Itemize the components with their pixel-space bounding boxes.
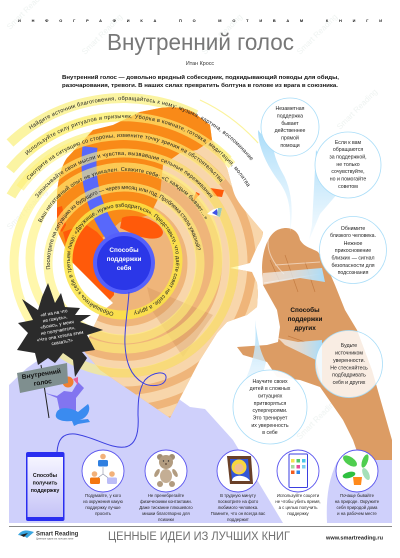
caption 4: а с целью получить <box>279 505 318 510</box>
callout 3: Нежное <box>344 241 362 247</box>
callout 5: притворяться <box>254 401 287 407</box>
caption 3: поддержит <box>227 517 249 522</box>
dark speech star: сказать?» <box>51 338 74 346</box>
caption 3: Помните, что он всегда вас <box>211 511 266 516</box>
phone: поддержку <box>31 488 59 494</box>
caption 2 <box>139 493 193 522</box>
caption 2: мишки благотворно для <box>142 511 190 516</box>
inner yellow rings <box>14 117 234 373</box>
callout 2: не только <box>336 162 360 168</box>
dark speech star: «Боюсь, у меня <box>40 319 75 330</box>
text: Smart Reading <box>295 12 339 56</box>
caption 1: из окружения какую <box>83 499 124 504</box>
caption 3: В трудную минуту <box>220 493 257 498</box>
callout 3: Обнимите <box>341 226 365 232</box>
footer logo: Ценные идеи из лучших книг <box>36 536 74 540</box>
ring text 1: Найдите источник благоговения, обращайтесь к нему: музыка, картина, воспоминание <box>28 96 253 160</box>
hand label: других <box>294 325 316 332</box>
dark speech star <box>17 283 103 377</box>
ring text 3: Смотрите на ситуацию со стороны, измените точку зрения на обстоятельства <box>26 134 222 182</box>
character with sign <box>17 363 90 426</box>
red patches <box>120 216 163 239</box>
callout 1: действеннее <box>275 127 306 134</box>
callout 1: бывает <box>281 121 299 127</box>
callout 4: источником <box>335 350 363 356</box>
callout 3: близких — сигнал <box>331 256 375 262</box>
callout 5: их уверенность <box>251 423 289 429</box>
callout 2: Если к вам <box>335 140 362 146</box>
caption 2: психики <box>158 517 174 522</box>
phone <box>26 452 64 521</box>
icon: teddy bear <box>145 450 187 492</box>
footer logo <box>18 530 79 540</box>
callout 3: безопасности для <box>331 263 375 269</box>
dark speech star: не получается», <box>40 325 76 336</box>
text: Smart Reading <box>335 87 379 131</box>
caption 4: Используйте соцсети <box>277 493 320 498</box>
caption 2: физическими контактами. <box>140 499 192 504</box>
eye <box>207 208 222 217</box>
text: Smart Reading <box>5 187 49 231</box>
callout 1 <box>261 98 319 156</box>
ring text 5: Ваш негативный опыт не уникален. Скажите себе: «С каждым бывает…» <box>38 167 207 222</box>
caption 4: не чтобы убить время, <box>275 499 321 504</box>
character with sign: Внутренний <box>21 367 62 381</box>
text: Smart Reading <box>295 397 339 441</box>
innermost yellow ring <box>68 205 178 315</box>
caption 4: поддержку <box>287 511 310 516</box>
caption 1 <box>83 493 124 516</box>
center circle: Способы <box>109 246 139 254</box>
callout 3: прикосновение <box>335 248 371 254</box>
callout 4: Будьте <box>341 343 357 349</box>
callout 4: себя и других <box>333 380 366 386</box>
callout 5: ситуациях <box>258 394 283 400</box>
center circle: себя <box>117 264 132 272</box>
character with sign: голос <box>33 378 53 388</box>
intro text: разочарования, тревоги. В наших силах превратить болтуна в голове из врага в союзника. <box>62 82 338 89</box>
thin outer arc <box>200 100 258 143</box>
title: Внутренний голос <box>107 29 294 55</box>
callout 1: прямой <box>281 134 299 142</box>
callout 4 <box>316 330 382 398</box>
icon: framed photo <box>217 450 259 492</box>
caption 3: посмотрите на фото <box>218 499 259 504</box>
callout 2: но и помогайте <box>330 176 366 182</box>
caption 2: Не пренебрегайте <box>148 493 185 498</box>
callout 5: супергероями. <box>253 408 287 414</box>
callout 5 <box>233 370 307 444</box>
outer yellow rings <box>10 98 228 196</box>
head with rings <box>57 107 263 418</box>
caption 5 <box>335 493 380 516</box>
caption 3: любимого человека. <box>218 505 258 510</box>
caption 4 <box>275 493 321 516</box>
dark speech star: «И на на что <box>40 308 68 318</box>
callout tails <box>238 130 338 392</box>
callout 2: советом <box>338 184 358 190</box>
callout 2 <box>315 132 381 198</box>
ring text 4: Записывайте свои мысли и чувства, вызвавшие сильные переживания <box>35 152 212 198</box>
caption 5: на природе. Окружите <box>335 499 380 504</box>
dark speech star: «Что она хотела этим <box>36 330 84 343</box>
callout 2: обращаются <box>333 147 363 153</box>
ring texts <box>24 96 253 316</box>
phone: получить <box>33 480 58 486</box>
hand label: поддержки <box>288 316 322 323</box>
cable <box>57 292 166 452</box>
center circle: поддержки <box>107 256 141 263</box>
callout 1: помощи <box>280 143 300 149</box>
callout 2: за поддержкой, <box>329 154 367 160</box>
intro text <box>62 74 339 89</box>
hand label <box>288 306 322 332</box>
hand <box>237 228 392 460</box>
author: Итан Кросс <box>186 61 214 67</box>
caption 3 <box>211 493 266 522</box>
callout 4: подбадривать <box>332 372 366 378</box>
caption 5: и на рабочем месте <box>337 511 377 516</box>
callout 3: подсознания <box>338 270 369 276</box>
callout 5: в себе <box>262 430 278 436</box>
caption 2: Даже тискание плюшевого <box>139 505 193 510</box>
body silhouette <box>9 345 392 523</box>
text: Smart Reading <box>200 12 244 56</box>
callout 3 <box>320 216 386 284</box>
ring text 2: Используйте силу ритуалов и призычек. Уборка в комнате, готовка, медитация, молитва <box>24 114 250 187</box>
caption 5: Почаще бывайте <box>340 493 375 498</box>
callout 1: поддержка <box>277 114 303 120</box>
intro text: Внутренний голос — довольно вредный собеседник, подкидывающий поводы для обиды, <box>62 74 339 81</box>
ring text 6: Посмотрите на ситуацию из будущего — через месяц или год. Проблема стала ужасной? <box>46 186 201 270</box>
icon: potted plant <box>336 450 378 492</box>
callout 1: Незаметная <box>276 106 305 112</box>
callout 4: уверенности. <box>333 358 365 364</box>
blue band <box>89 147 116 240</box>
caption 5: себя природой дома <box>337 505 378 510</box>
callout 3: близкого человека. <box>330 233 376 239</box>
callout 4: Не стесняйтесь <box>330 364 368 372</box>
icon: people <box>82 450 124 492</box>
callout 5: детей в сложных <box>250 385 291 392</box>
dark wedge <box>147 287 213 357</box>
footer logo: Smart Reading <box>36 532 79 538</box>
caption 1: поддержку лучше <box>85 505 121 510</box>
caption 1: просить <box>95 511 112 516</box>
center circle <box>93 232 155 294</box>
footer slogan: ЦЕННЫЕ ИДЕИ ИЗ ЛУЧШИХ КНИГ <box>108 531 291 543</box>
callout 5: Это тренирует <box>253 416 288 422</box>
hand label: Способы <box>290 306 320 314</box>
phone: Способы <box>33 472 58 479</box>
ring text 7: Обращайтесь к себе в третьем лице: «Дружище, нужно взбодриться». Представьте, что даёте совет не себе, а другу <box>67 202 180 316</box>
orange brain area <box>50 103 214 265</box>
callout 2: сочувствуйте, <box>331 168 365 175</box>
icon: smartphone <box>277 450 319 492</box>
footer url: www.smartreading.ru <box>325 536 383 542</box>
caption 1: Подумайте, у кого <box>85 493 122 498</box>
dark speech star: не гожусь», <box>42 314 68 323</box>
text: Smart Reading <box>80 12 124 56</box>
header label: ИНФОГРАФИКА ПО МОТИВАМ КНИГИ <box>18 18 382 23</box>
callout 5: Научите своих <box>252 379 288 385</box>
